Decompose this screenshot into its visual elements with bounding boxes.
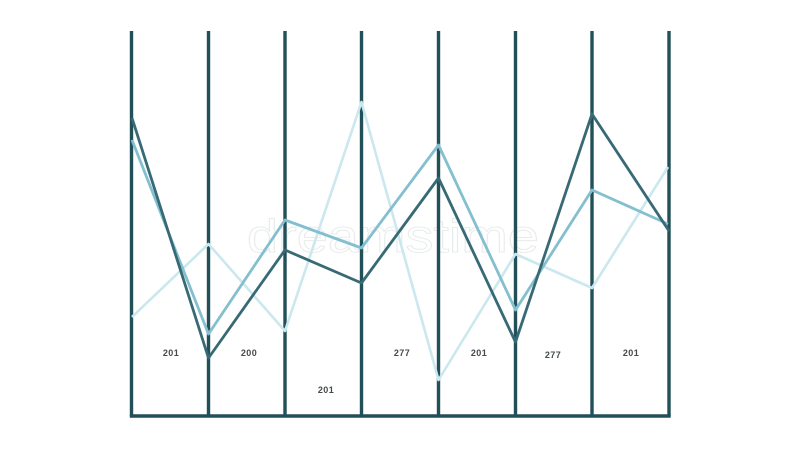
label: column 7: 201 [623,348,639,358]
axes frame [130,31,671,416]
label: column 5: 201 [471,348,487,358]
label: column 6: 277 [545,350,561,360]
data labels [163,348,639,395]
line series: dark [132,114,669,358]
label: column 1: 201 [163,348,179,358]
label: column 3: 201 [318,385,334,395]
watermark: dreamstime [247,210,539,262]
label: column 2: 200 [241,348,257,358]
label: column 4: 277 [394,348,410,358]
line series: medium [132,140,668,334]
line series: light [132,102,668,380]
